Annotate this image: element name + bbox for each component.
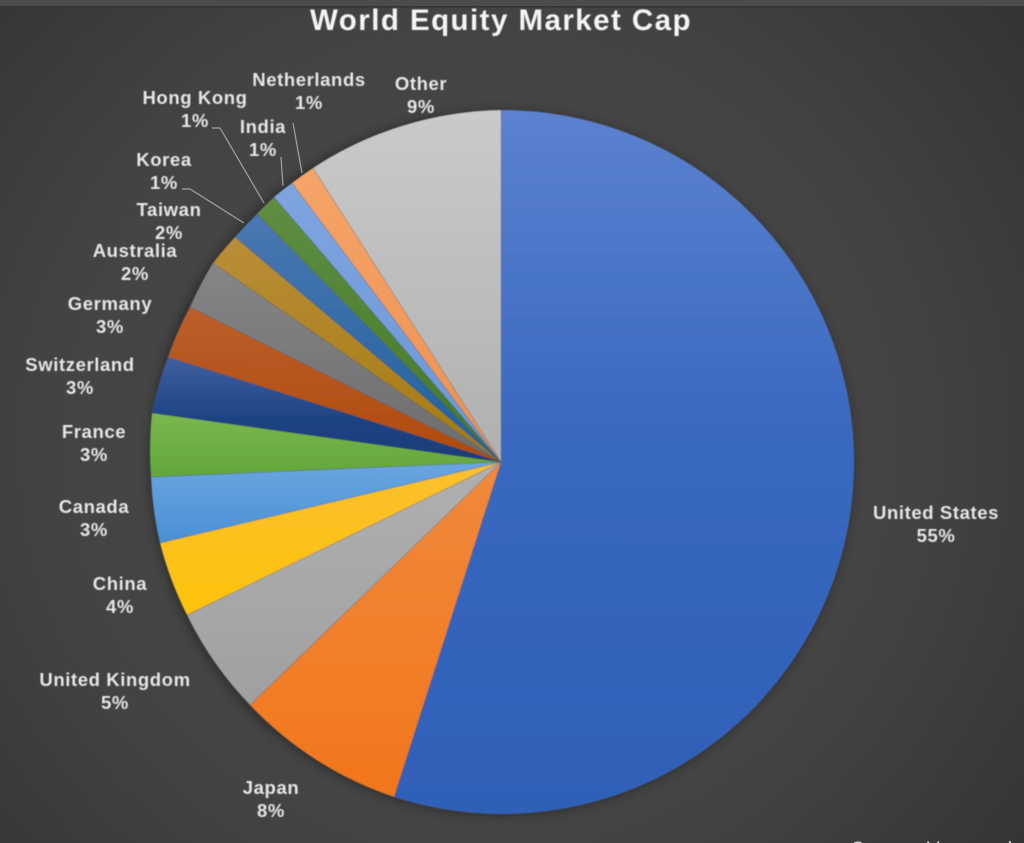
- slice: Germany 3%: [168, 307, 501, 462]
- slice: Taiwan 2%: [213, 237, 501, 462]
- slice: Australia 2%: [190, 263, 501, 462]
- label: Japan: 8%: [257, 800, 285, 821]
- label: France: France: [62, 421, 126, 442]
- label: Australia: Australia: [93, 240, 177, 261]
- slice: Japan 8%: [250, 462, 501, 797]
- label: Other: 9%: [407, 96, 435, 117]
- slice: United States 55%: [394, 110, 854, 814]
- label: Germany: Germany: [68, 293, 152, 314]
- label: France: 3%: [80, 444, 108, 465]
- pie chart: [147, 109, 855, 817]
- title: World Equity Market Cap: [310, 4, 692, 37]
- leader lines: [182, 123, 302, 223]
- label: China: China: [93, 573, 147, 594]
- label: Germany: 3%: [96, 316, 124, 337]
- slice: United Kingdom 5%: [187, 462, 501, 705]
- label: Korea: 1%: [150, 172, 178, 193]
- label: United Kingdom: United Kingdom: [39, 669, 191, 690]
- label: Other: Other: [395, 73, 447, 94]
- label: Australia: 2%: [121, 263, 149, 284]
- label: Canada: Canada: [59, 496, 129, 517]
- slice: Other 9%: [313, 110, 501, 462]
- label: Taiwan: 2%: [155, 222, 183, 243]
- slice: Hong Kong 1%: [257, 197, 501, 462]
- label: Switzerland: 3%: [66, 377, 94, 398]
- label: India: 1%: [249, 139, 277, 160]
- slice: Switzerland 3%: [152, 357, 501, 462]
- label: Hong Kong: Hong Kong: [142, 87, 248, 108]
- label: United States: 55%: [917, 525, 955, 546]
- label: Hong Kong: 1%: [181, 110, 209, 131]
- slice: Canada 3%: [151, 462, 501, 543]
- label: Netherlands: Netherlands: [252, 69, 366, 90]
- slice: Korea 1%: [235, 214, 501, 462]
- label: Switzerland: Switzerland: [25, 354, 135, 375]
- label: United States: United States: [873, 502, 999, 523]
- label: Canada: 3%: [80, 519, 108, 540]
- slice: India 1%: [274, 183, 501, 462]
- label: Japan: Japan: [243, 777, 299, 798]
- label: United Kingdom: 5%: [101, 692, 129, 713]
- label: Korea: Korea: [136, 149, 192, 170]
- label: Netherlands: 1%: [295, 92, 323, 113]
- label: Taiwan: Taiwan: [137, 199, 201, 220]
- label: India: India: [240, 116, 286, 137]
- slice: France 3%: [150, 413, 501, 477]
- label: China: 4%: [106, 596, 134, 617]
- slice: Netherlands 1%: [292, 168, 501, 462]
- slice: China 4%: [160, 462, 501, 615]
